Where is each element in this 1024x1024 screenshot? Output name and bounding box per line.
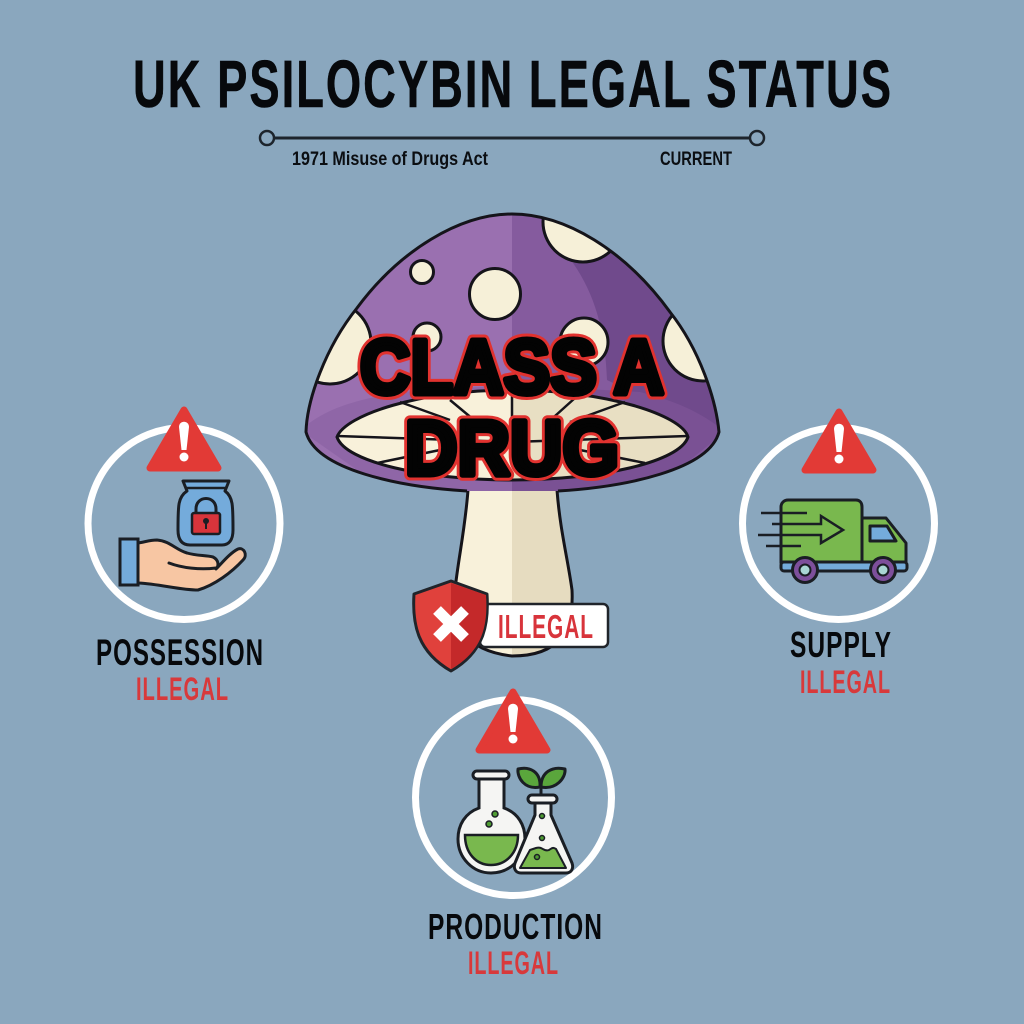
icon: hand bbox=[120, 539, 245, 590]
icon: round flask bbox=[458, 771, 525, 873]
panel: production bbox=[416, 692, 612, 981]
supply label: SUPPLY bbox=[790, 624, 892, 665]
panel: possession bbox=[88, 410, 280, 707]
icon: shield with x bbox=[414, 581, 487, 671]
panel: supply bbox=[742, 412, 934, 700]
possession label: POSSESSION bbox=[96, 632, 264, 673]
class a drug label: DRUG bbox=[405, 406, 619, 492]
class a drug label: DRUG bbox=[405, 406, 619, 492]
icon: delivery truck bbox=[758, 500, 907, 582]
icon: conical flask with sprout bbox=[514, 768, 573, 873]
icon: warning triangle bbox=[805, 412, 873, 470]
possession ring bbox=[88, 428, 280, 620]
icon: warning triangle bbox=[150, 410, 218, 468]
possession status: ILLEGAL bbox=[136, 671, 229, 707]
class a drug label bbox=[360, 324, 664, 492]
timeline: 1971 Misuse of Drugs Act bbox=[292, 149, 489, 170]
timeline bbox=[260, 131, 764, 170]
mushroom cap bbox=[304, 212, 720, 492]
production status: ILLEGAL bbox=[468, 945, 559, 981]
supply status: ILLEGAL bbox=[800, 664, 891, 700]
supply ring bbox=[742, 428, 934, 620]
production label: PRODUCTION bbox=[428, 906, 603, 947]
icon: locked jar bbox=[178, 481, 233, 545]
production ring bbox=[416, 700, 612, 896]
illegal tag: ILLEGAL bbox=[498, 608, 594, 645]
icon: warning triangle bbox=[479, 692, 547, 750]
illegal tag bbox=[480, 604, 608, 647]
class a drug label: CLASS A bbox=[360, 324, 664, 410]
mushroom stem bbox=[454, 491, 574, 658]
class a drug label: CLASS A bbox=[360, 324, 664, 410]
mushroom gills bbox=[330, 385, 692, 485]
shield and illegal tag bbox=[414, 581, 608, 671]
timeline: CURRENT bbox=[660, 149, 732, 170]
mushroom illustration bbox=[289, 182, 743, 671]
